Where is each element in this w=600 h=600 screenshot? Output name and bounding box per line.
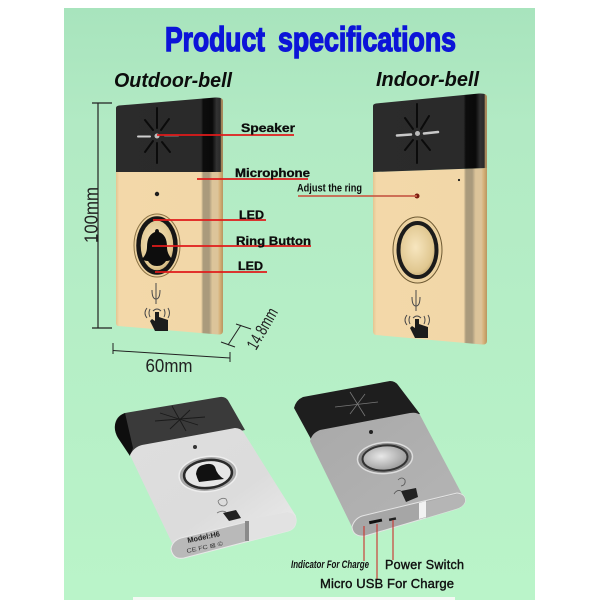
icon: mic and touch hand — [145, 283, 170, 331]
ring adjust hole — [414, 194, 420, 198]
label: Micro USB For Charge: Micro USB For Charge — [320, 576, 454, 591]
charge port callout lines — [364, 520, 393, 579]
microphone hole — [458, 179, 460, 181]
label: Microphone: Microphone — [235, 166, 310, 180]
micro USB port — [369, 519, 382, 524]
speaker grille — [335, 392, 378, 416]
silver outdoor device — [115, 397, 296, 558]
end face — [352, 493, 465, 536]
icon: speaker grille — [397, 104, 438, 163]
label: Ring Button: Ring Button — [236, 234, 311, 248]
label: Indicator For Charge: Indicator For Charge — [291, 559, 369, 571]
microphone hole — [193, 445, 197, 449]
indoor doorbell device — [373, 93, 487, 345]
microphone hole — [155, 192, 159, 196]
outdoor doorbell device — [116, 97, 223, 335]
silver body — [130, 428, 296, 545]
title: specifications — [278, 21, 456, 59]
power switch — [389, 517, 396, 521]
dimension: 14.8mm — [221, 305, 282, 353]
dimension: 60mm: 60mm — [146, 356, 192, 376]
speaker grille — [155, 406, 205, 431]
end face — [171, 512, 296, 558]
dimension: 100mm: 100mm — [82, 187, 102, 243]
bottom white strip — [133, 597, 455, 600]
heading: indoor bell: Indoor-bell — [376, 69, 479, 91]
black speaker section — [115, 397, 245, 456]
microphone hole — [369, 430, 373, 434]
icon: mic and touch hand — [405, 290, 430, 338]
label: LED upper: LED — [239, 208, 264, 222]
black speaker section — [294, 381, 420, 441]
certification marks: CE FC ⊠ © — [186, 540, 224, 555]
silver body — [310, 413, 465, 527]
ring button — [393, 217, 442, 283]
model text: Model:H6 — [187, 529, 221, 545]
dimension: 60mm — [113, 343, 230, 376]
label: LED lower: LED — [238, 259, 263, 273]
ring button with bell — [134, 214, 180, 277]
icon: mic and touch hand — [217, 498, 241, 521]
dimension: 14.8mm: 14.8mm — [243, 305, 282, 353]
callout lines — [152, 135, 417, 272]
green background panel — [64, 8, 535, 600]
label: Power Switch: Power Switch — [385, 558, 464, 572]
icon: touch hand — [394, 478, 418, 502]
title — [165, 21, 456, 59]
button — [356, 441, 414, 475]
bell button — [177, 454, 239, 494]
icon: speaker grille — [138, 108, 178, 163]
label: Adjust the ring: Adjust the ring — [297, 182, 362, 194]
heading: outdoor bell: Outdoor-bell — [114, 70, 232, 92]
title: Product — [165, 21, 265, 59]
silver indoor device — [294, 381, 465, 536]
label: Speaker: Speaker — [241, 121, 295, 135]
